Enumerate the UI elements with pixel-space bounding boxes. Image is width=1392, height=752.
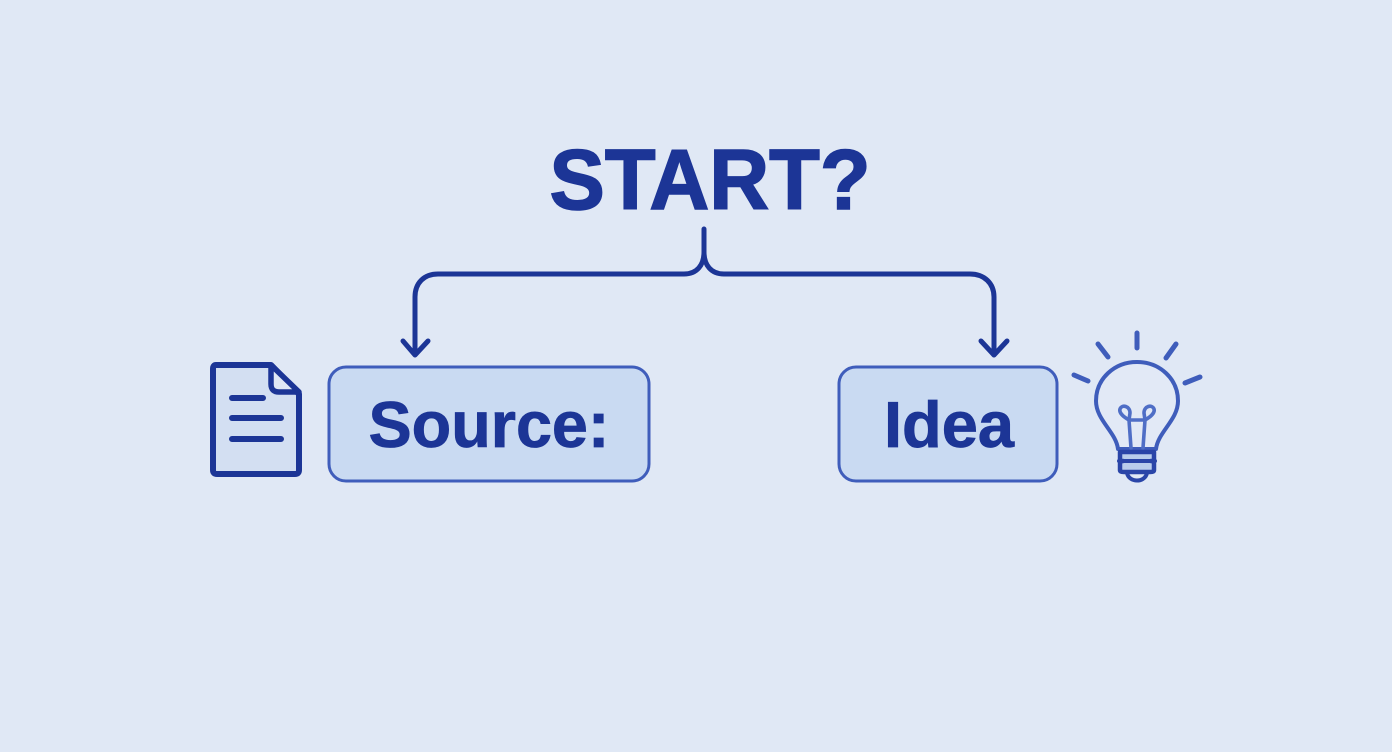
branching arrows <box>403 229 1007 355</box>
title: START? <box>550 133 870 228</box>
box: idea: Idea <box>884 388 1015 461</box>
box: idea <box>839 367 1057 481</box>
box: source <box>329 367 649 481</box>
box: source: Source: <box>368 388 610 461</box>
icon: light bulb <box>1074 333 1200 480</box>
icon: document <box>213 365 299 474</box>
